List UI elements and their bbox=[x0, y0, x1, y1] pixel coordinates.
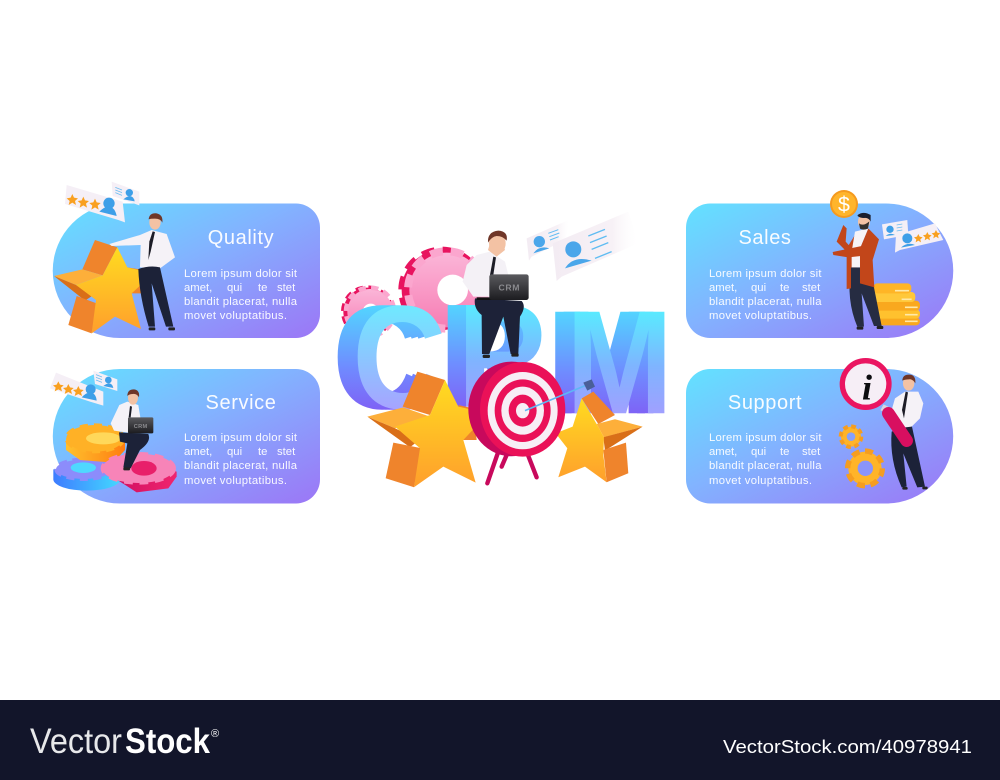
icon: rating card bbox=[50, 373, 103, 406]
icon: large pink gear bbox=[402, 250, 485, 330]
letter R: R bbox=[439, 274, 530, 439]
text block: support: qui bbox=[751, 446, 766, 458]
man: support bbox=[891, 375, 928, 490]
letter C: C bbox=[332, 276, 426, 440]
icon: small pink gear bbox=[343, 288, 394, 336]
icon: star bbox=[54, 240, 153, 333]
heading: support: Support bbox=[728, 392, 802, 414]
image id: VectorStock.com/40978941 bbox=[723, 737, 972, 757]
text block: sales: stet bbox=[802, 282, 821, 294]
icon: profile card bbox=[882, 220, 908, 239]
icon: pink gear bbox=[102, 454, 177, 492]
icon: small gear bbox=[841, 426, 861, 447]
heading: quality: Quality bbox=[208, 227, 274, 249]
text block: sales: amet, bbox=[709, 282, 737, 294]
footer bar bbox=[0, 700, 1000, 780]
logo: Vector bbox=[30, 722, 122, 761]
text block: support: te bbox=[780, 446, 789, 458]
panel: sales bbox=[686, 190, 953, 338]
text block: support: movet voluptatibus. bbox=[709, 475, 812, 487]
letter C: C bbox=[352, 276, 446, 440]
icon: coin: $ bbox=[838, 193, 850, 217]
text block: service: stet bbox=[277, 446, 296, 458]
man with CRM laptop: CRM bbox=[498, 283, 520, 293]
icon: left star bbox=[367, 372, 488, 487]
text block: service: qui bbox=[227, 446, 242, 458]
text block: quality: movet voluptatibus. bbox=[184, 310, 287, 322]
text block: quality: stet bbox=[277, 282, 296, 294]
target on stand bbox=[468, 362, 595, 483]
text block: service: te bbox=[258, 446, 267, 458]
text block: service bbox=[184, 432, 298, 487]
text block: sales bbox=[709, 268, 822, 322]
illustration: quality star and man bbox=[54, 182, 175, 333]
panel background: sales bbox=[686, 204, 953, 338]
text block: support: Lorem ipsum dolor sit bbox=[709, 432, 822, 444]
icon: right star bbox=[556, 392, 643, 482]
panel background: support bbox=[686, 369, 953, 504]
panel: quality bbox=[53, 182, 320, 338]
man with CRM laptop bbox=[463, 231, 529, 358]
icon: orange gear bbox=[66, 425, 125, 463]
icon: blue gear bbox=[53, 460, 120, 491]
text block: service: Lorem ipsum dolor sit bbox=[184, 432, 298, 444]
text block: support bbox=[709, 432, 822, 487]
letter M: M bbox=[566, 281, 673, 445]
illustration: service gears and man bbox=[50, 371, 177, 492]
logo: Stock bbox=[125, 722, 210, 761]
text block: sales: movet voluptatibus. bbox=[709, 310, 812, 322]
text block: service: amet, bbox=[184, 446, 212, 458]
man: service: CRM bbox=[134, 424, 148, 430]
icon: magnifier: i bbox=[862, 367, 872, 407]
icon: rating card bbox=[895, 223, 943, 253]
arrow bbox=[525, 379, 595, 411]
letter C: C bbox=[339, 276, 433, 440]
heading: sales: Sales bbox=[738, 227, 792, 249]
text block: sales: blandit placerat, nulla bbox=[709, 296, 822, 308]
text block: support: amet, bbox=[709, 446, 737, 458]
icon: profile card bbox=[93, 371, 117, 391]
3D letters CRM bbox=[332, 274, 673, 445]
text block: quality: amet, bbox=[184, 282, 212, 294]
text block: support: blandit placerat, nulla bbox=[709, 460, 822, 472]
icon: large gear bbox=[848, 451, 882, 486]
text block: quality: blandit placerat, nulla bbox=[184, 296, 298, 308]
heading: service: Service bbox=[206, 392, 276, 414]
man: quality bbox=[109, 213, 175, 330]
illustration: support magnifier and man bbox=[841, 361, 928, 490]
letter R: R bbox=[447, 274, 537, 439]
icon: coin stack bbox=[873, 283, 920, 325]
logo: ® bbox=[211, 728, 219, 740]
panel background: service bbox=[53, 369, 320, 504]
panel: support bbox=[686, 361, 953, 504]
letter C: C bbox=[346, 276, 440, 440]
icon: rating card bbox=[65, 185, 125, 222]
text block: service: movet voluptatibus. bbox=[184, 475, 287, 487]
text block: quality: Lorem ipsum dolor sit bbox=[184, 268, 298, 280]
text block: sales: te bbox=[780, 282, 789, 294]
panel: service bbox=[50, 369, 320, 504]
text block: support: stet bbox=[802, 446, 821, 458]
text block: quality bbox=[184, 268, 298, 322]
text block: quality: qui bbox=[227, 282, 242, 294]
icon: profile cards bbox=[527, 212, 638, 281]
central CRM illustration bbox=[332, 212, 673, 487]
text block: quality: te bbox=[258, 282, 267, 294]
letter M: M bbox=[555, 281, 662, 445]
text block: service: blandit placerat, nulla bbox=[184, 460, 298, 472]
man: sales bbox=[833, 213, 883, 330]
text block: sales: Lorem ipsum dolor sit bbox=[709, 268, 822, 280]
letter M: M bbox=[547, 281, 654, 445]
illustration: sales man and coins bbox=[830, 190, 943, 330]
icon: profile card bbox=[112, 182, 139, 205]
letter R: R bbox=[458, 274, 548, 439]
panel background: quality bbox=[53, 204, 320, 338]
logo bbox=[30, 722, 219, 761]
text block: sales: qui bbox=[751, 282, 766, 294]
